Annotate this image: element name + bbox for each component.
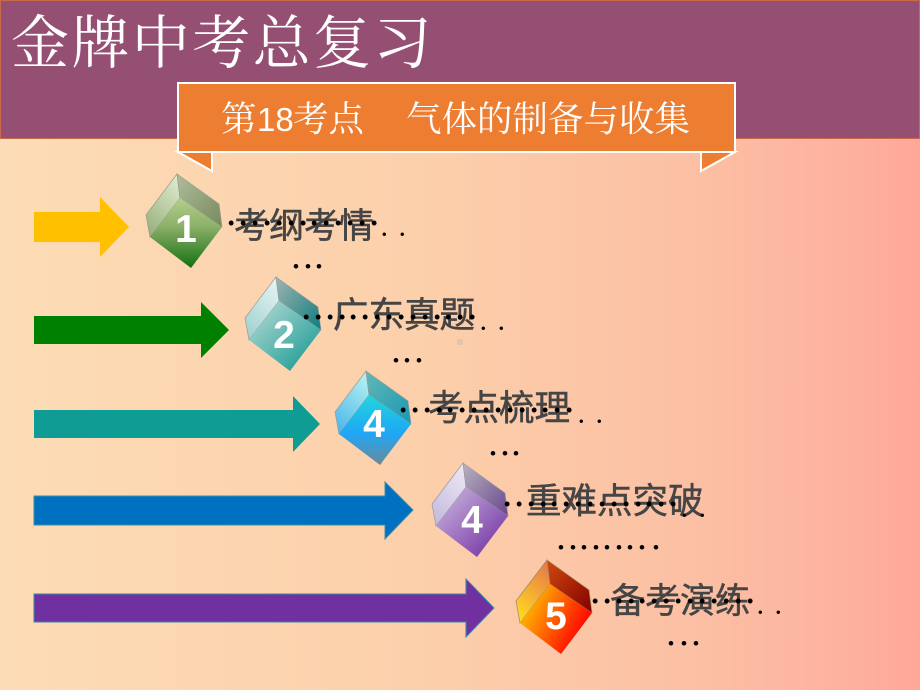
row 4 leader dots: •• <box>682 508 705 522</box>
banner text: 气体的制备与收集 <box>406 99 690 139</box>
cube 4: 4 <box>461 499 483 542</box>
row 2 leader dots: ••••••••••••••• <box>303 307 475 327</box>
row 1 label <box>228 207 405 276</box>
row 1 leader dots: ••••••••••••• <box>228 213 377 233</box>
row 3 leader dots: ••••••••••••••• <box>400 400 572 420</box>
row 3 leader dots: •• <box>579 414 602 428</box>
row 3 leader dots: ••• <box>490 444 519 463</box>
row 1 leader dots: •• <box>382 226 405 242</box>
title: 金牌中考总复习 <box>11 11 434 76</box>
row 5 leader dots: •••••••••••••• <box>592 591 753 611</box>
arrow 2 <box>34 302 229 358</box>
arrow 1 <box>34 197 129 257</box>
row 1 label: 考纲考情 <box>234 207 374 246</box>
row 2 leader dots: ••• <box>393 351 422 370</box>
row 4 label: 重难点突破 <box>526 481 704 521</box>
row 5 leader dots: •• <box>758 604 781 620</box>
row 5 label: 备考演练 <box>610 582 750 621</box>
row 2 leader dots: •• <box>481 320 504 336</box>
banner: topic <box>178 83 735 171</box>
banner text: 18 <box>257 101 294 138</box>
row 5 leader dots: ••• <box>668 634 699 653</box>
row 3 label: 考点梳理 <box>428 388 570 428</box>
cube 1: 1 <box>175 208 197 251</box>
cube 1 <box>146 174 222 268</box>
arrow 5 <box>34 579 494 637</box>
cube 3: 4 <box>363 403 385 446</box>
arrow 4 <box>34 482 413 539</box>
cube 3 <box>335 371 411 465</box>
banner text: 考点 <box>293 99 366 139</box>
banner text: 第 <box>221 99 257 139</box>
row 1 leader dots: ••• <box>293 257 322 276</box>
header band <box>0 0 920 138</box>
row 4 label <box>504 481 705 557</box>
cube 4 <box>432 463 508 557</box>
cube 5: 5 <box>545 595 567 638</box>
row 4 leader dots: ••••••••••••••• <box>504 494 676 514</box>
cube 2: 2 <box>273 314 295 357</box>
row 2 label <box>303 295 504 370</box>
row 3 label <box>400 388 602 463</box>
cube 2 <box>245 277 321 371</box>
small square mark <box>457 339 463 345</box>
row 2 label: 广东真题 <box>333 295 475 335</box>
row 5 label <box>592 582 781 653</box>
cube 5 <box>516 560 592 654</box>
row 4 leader dots: ••••••••• <box>558 538 659 557</box>
arrow 3 <box>34 396 320 452</box>
